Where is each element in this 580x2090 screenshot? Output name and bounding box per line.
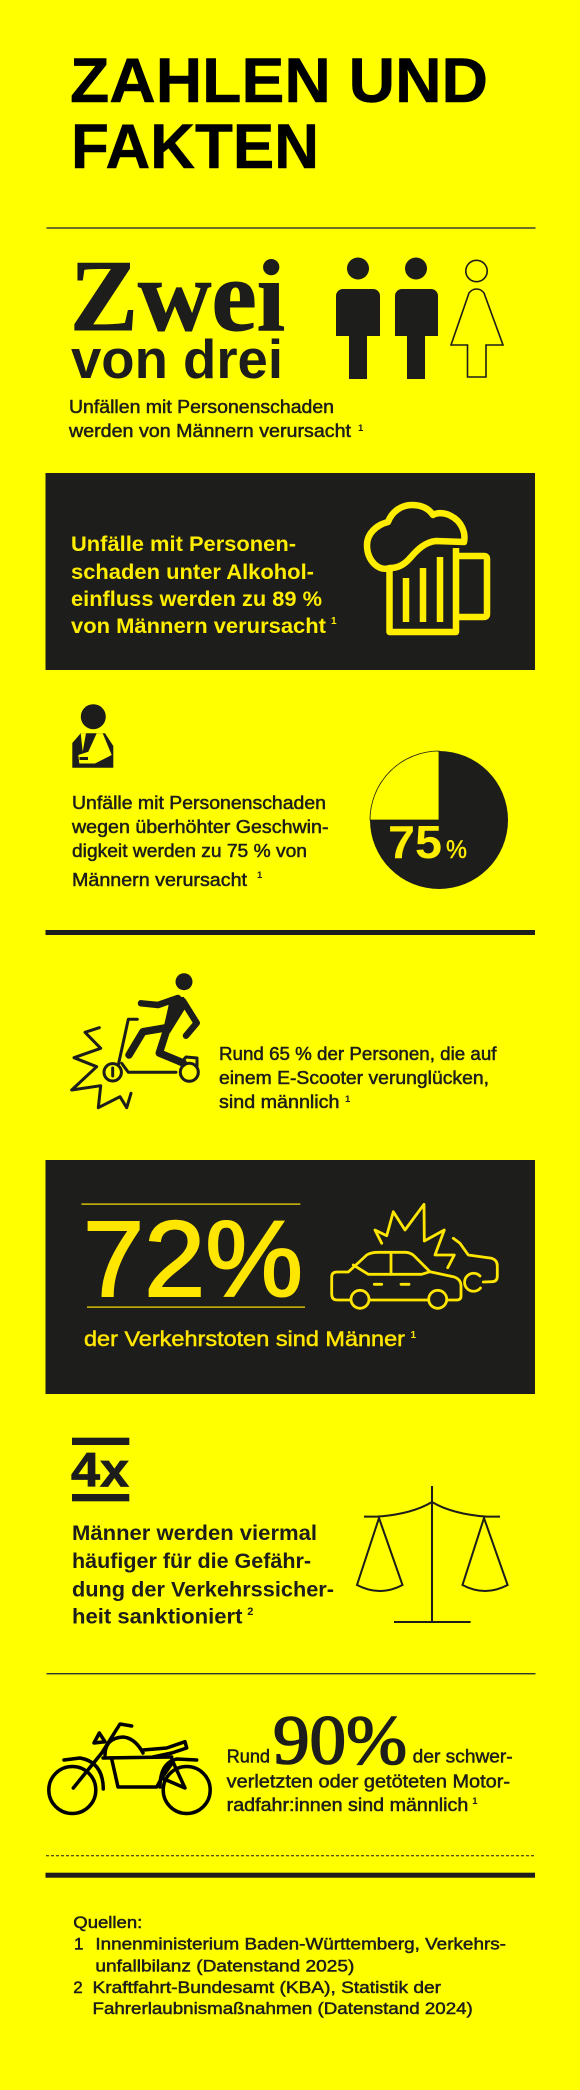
sources: Quellen: — [73, 1913, 142, 1932]
heading: Zwei von drei: Zwei — [70, 240, 285, 353]
text: sanctions — [72, 1522, 334, 1628]
text: alcohol accidents: von Männern verursacht — [71, 615, 326, 638]
text: accidents caused by men: werden von Männern verursacht — [68, 421, 351, 441]
sources: Kraftfahrt-Bundesamt (KBA), Statistik der — [92, 1978, 441, 1997]
panel: motorcycle — [49, 1702, 513, 1815]
text: motorcycle victims: Rund — [227, 1745, 270, 1766]
text: motorcycle victims: radfahr:innen sind männlich — [227, 1794, 468, 1815]
sources: 2 — [73, 1978, 83, 1997]
heading: Zwei von drei: von drei — [71, 328, 283, 390]
text: speeding accidents: Männern verursacht — [72, 870, 247, 890]
text: speeding accidents: digkeit werden zu 75 % von — [72, 841, 307, 861]
text: sanctions: Männer werden viermal — [72, 1522, 317, 1545]
sources: Fahrerlaubnismaßnahmen (Datenstand 2024) — [92, 1999, 473, 2018]
sources: unfallbilanz (Datenstand 2025) — [95, 1956, 354, 1975]
icon: e-scooter accident — [72, 973, 198, 1108]
text: motorcycle victims — [227, 1702, 513, 1815]
text: alcohol accidents: 1 — [331, 616, 337, 627]
text: accidents caused by men: Unfällen mit Personenschaden — [69, 397, 334, 417]
text: accidents caused by men: 1 — [358, 423, 364, 434]
title: FAKTEN — [71, 112, 319, 182]
chart: 75 percent pie: % — [446, 836, 467, 864]
sources: 1 — [74, 1935, 83, 1954]
text: speeding accidents: Unfälle mit Personenschaden — [72, 793, 326, 813]
title — [70, 46, 488, 182]
icon: car crash — [332, 1204, 497, 1308]
text: alcohol accidents — [71, 533, 337, 638]
text: e-scooter victims: sind männlich — [219, 1092, 340, 1112]
text: sanctions: 2 — [247, 1606, 253, 1618]
sources — [73, 1913, 506, 2018]
text: alcohol accidents: einfluss werden zu 89 % — [71, 588, 322, 611]
stat: 72 percent: 72% — [83, 1198, 303, 1319]
panel: speeding — [71, 704, 508, 890]
text: e-scooter victims: Rund 65 % der Personen, die auf — [219, 1044, 498, 1064]
text: sanctions: heit sanktioniert — [72, 1605, 242, 1628]
text: alcohol accidents: schaden unter Alkohol- — [71, 561, 314, 584]
text: e-scooter victims: einem E-Scooter verunglücken, — [219, 1068, 489, 1088]
text: accidents caused by men — [68, 397, 364, 441]
chart: 75 percent pie: 75 — [388, 816, 442, 868]
icon: injured person with sling — [72, 704, 113, 768]
title: ZAHLEN UND — [70, 46, 488, 116]
text: traffic deaths are men: 1 — [410, 1330, 416, 1341]
text: traffic deaths are men: der Verkehrstoten sind Männer — [84, 1328, 405, 1351]
panel: traffic deaths — [46, 1160, 535, 1394]
panel: e-scooter — [72, 973, 498, 1112]
panel: two of three — [68, 240, 503, 441]
stat: 4x: 4x — [71, 1445, 129, 1498]
panel: alcohol — [46, 473, 535, 670]
text: motorcycle victims: 90% — [273, 1702, 407, 1779]
text: motorcycle victims: verletzten oder getöteten Motor- — [227, 1771, 510, 1792]
text: speeding accidents: wegen überhöhter Geschwin- — [71, 817, 328, 837]
icon: scales — [357, 1486, 508, 1622]
text: e-scooter victims — [219, 1044, 498, 1112]
chart: 75 percent pie — [370, 751, 508, 889]
text: sanctions: dung der Verkehrssicher- — [72, 1578, 334, 1602]
text: e-scooter victims: 1 — [345, 1094, 351, 1105]
text: sanctions: häufiger für die Gefähr- — [72, 1550, 311, 1573]
icon: motorcycle — [49, 1724, 210, 1814]
text: motorcycle victims: der schwer- — [413, 1745, 513, 1766]
text: speeding accidents: 1 — [257, 870, 263, 881]
text: alcohol accidents: Unfälle mit Personen- — [71, 533, 296, 556]
icon: two men and one woman — [336, 258, 503, 379]
icon: beer mug — [367, 505, 487, 632]
text: speeding accidents — [71, 793, 328, 890]
panel: four times — [71, 1438, 508, 1628]
text: motorcycle victims: 1 — [472, 1796, 478, 1807]
sources: Innenministerium Baden-Württemberg, Verkehrs- — [95, 1935, 506, 1954]
